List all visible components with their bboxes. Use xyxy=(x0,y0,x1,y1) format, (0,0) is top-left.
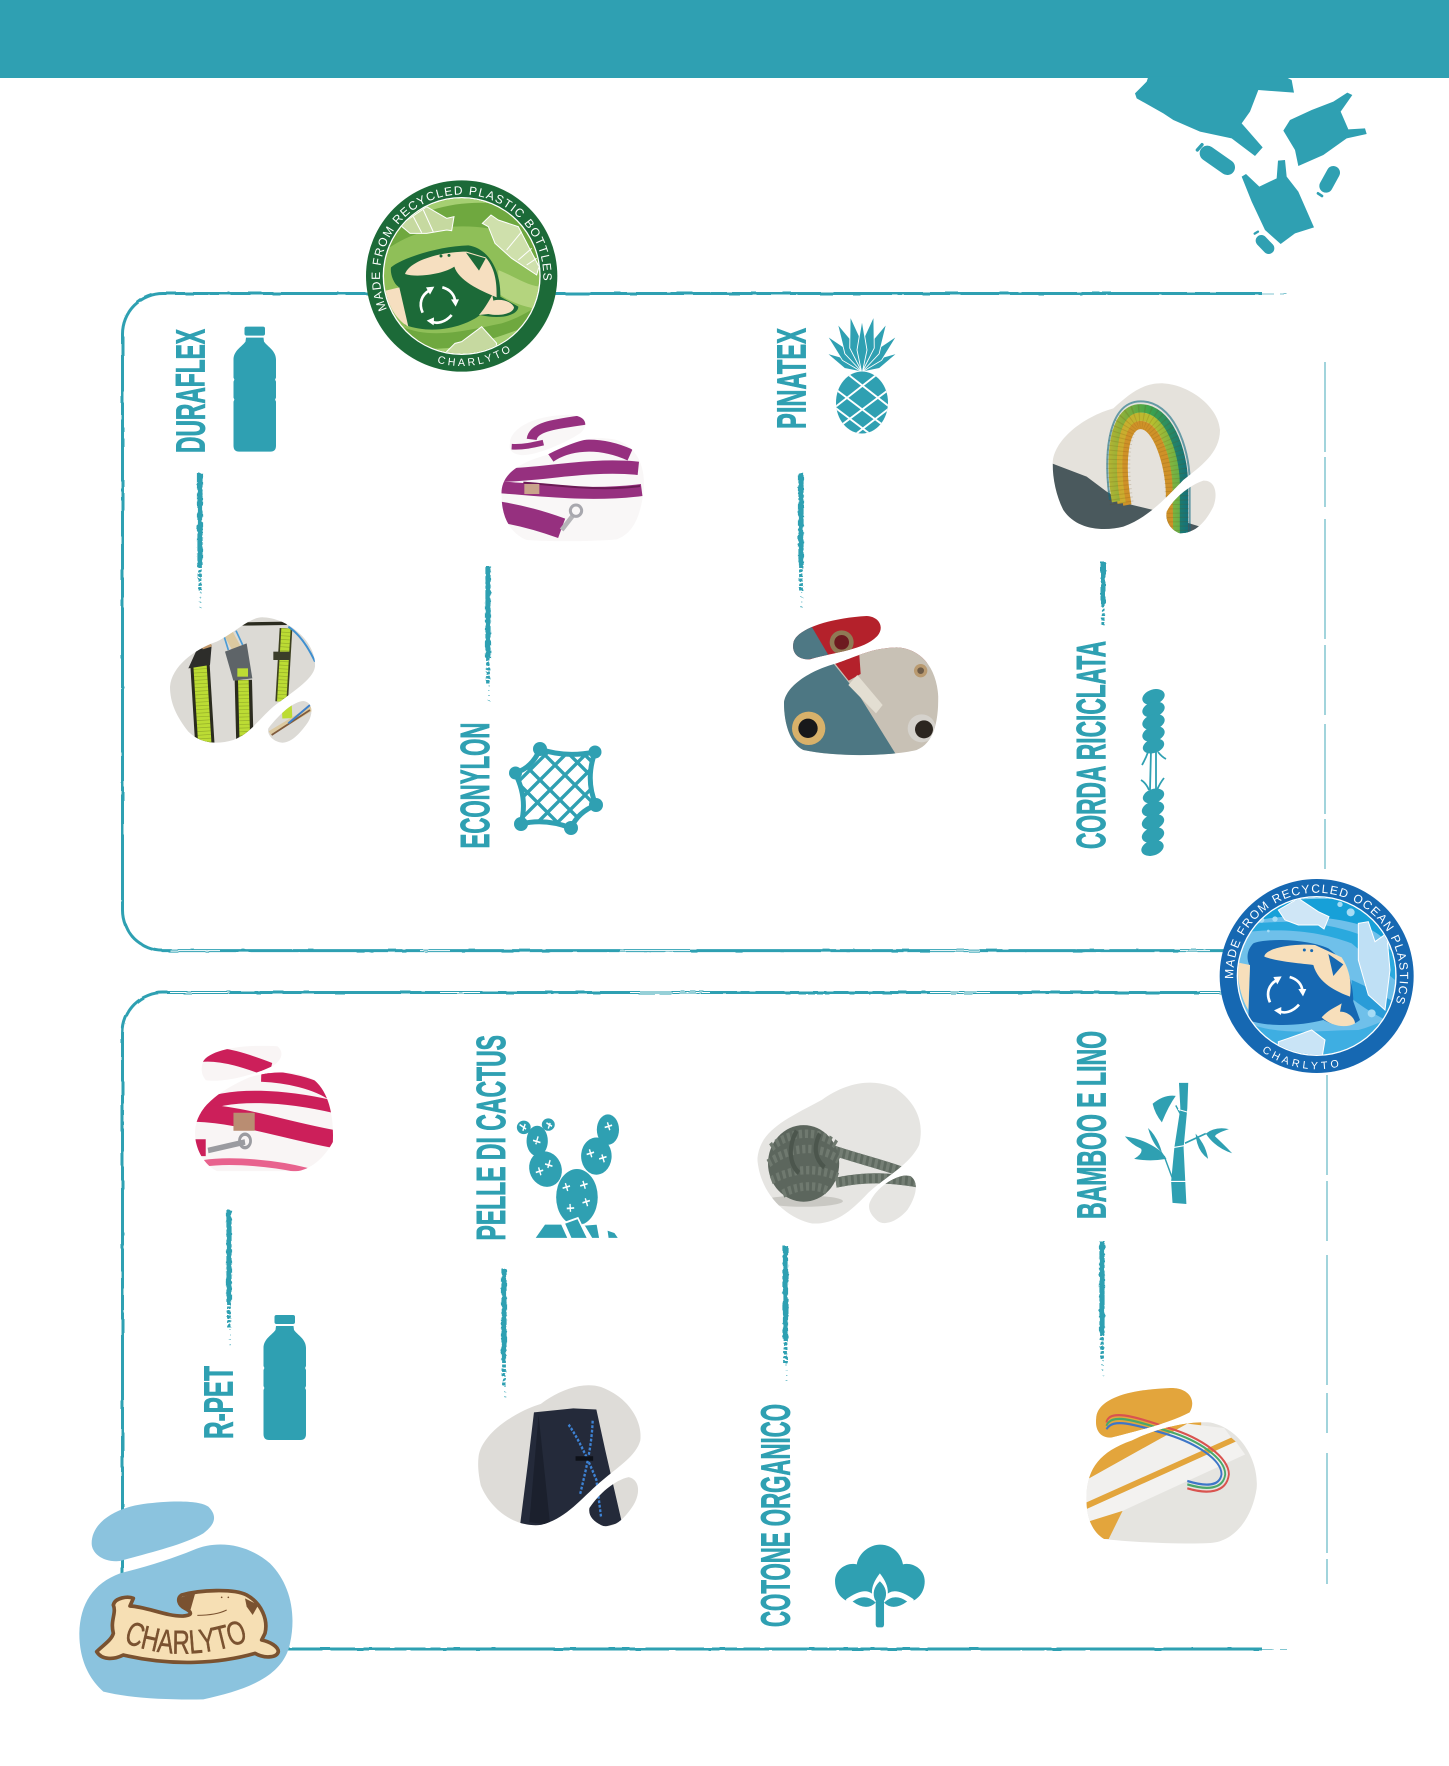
icon: bottle xyxy=(264,1315,306,1440)
label: Cotone organico: COTONE ORGANICO xyxy=(753,1404,799,1627)
icon: pineapple xyxy=(828,318,896,434)
logo dog details xyxy=(179,1594,258,1615)
icon: bottle xyxy=(234,327,276,452)
item: Duraflex xyxy=(170,326,315,743)
photo: black neoprene bag xyxy=(478,1385,640,1526)
divider brush stroke xyxy=(1102,1241,1103,1376)
badge: made from recycled plastic bottles: CHARLYTO xyxy=(438,346,510,366)
icon: bamboo xyxy=(1125,1083,1232,1204)
panel: recycled plastic frame xyxy=(122,294,1287,951)
item: Pinatex xyxy=(776,318,938,756)
header bar xyxy=(0,0,1449,78)
item: Cotone organico xyxy=(758,1082,925,1628)
photo: lime harness xyxy=(170,617,315,743)
divider brush stroke xyxy=(504,1269,505,1401)
divider brush stroke xyxy=(786,1246,787,1381)
divider brush stroke xyxy=(801,473,802,608)
icon: net xyxy=(509,742,603,835)
badge: made from recycled plastic bottles: MADE FROM RECYCLED PLASTIC BOTTLES xyxy=(372,186,552,312)
logo: Charlyto xyxy=(79,1502,292,1700)
label: Pelle di cactus: PELLE DI CACTUS xyxy=(468,1035,514,1240)
label: Duraflex: DURAFLEX xyxy=(168,329,214,453)
logo wordmark: CHARLYTO xyxy=(126,1621,246,1654)
item: Pelle di cactus xyxy=(476,1036,640,1526)
divider brush stroke xyxy=(1100,562,1106,625)
photo: green rope knot toy xyxy=(758,1082,921,1224)
label: R-PET: R-PET xyxy=(196,1366,242,1439)
label: Corda riciclata: CORDA RICICLATA xyxy=(1068,641,1114,849)
photo: pink leash xyxy=(195,1046,333,1172)
badge: made from recycled ocean plastics: MADE FROM RECYCLED OCEAN PLASTICS xyxy=(1224,884,1408,1004)
photo: orange and white fleece with rainbow cord xyxy=(1086,1388,1257,1544)
icon: rope xyxy=(1139,686,1167,859)
label: Pinatex: PINATEX xyxy=(768,328,814,429)
label: Bamboo e lino: BAMBOO E LINO xyxy=(1068,1031,1114,1219)
item: R-PET xyxy=(195,1046,333,1440)
photo: rainbow rope handle xyxy=(1052,383,1220,534)
icon: cactus xyxy=(517,1114,619,1239)
photo: pinatex patch with grommets xyxy=(784,616,938,756)
photo: magenta leash xyxy=(502,416,642,538)
logo lower blob xyxy=(79,1545,292,1699)
badge: made from recycled plastic bottles xyxy=(366,180,558,372)
panel: ocean plastic frame xyxy=(122,992,1287,1650)
icon: cotton flower xyxy=(835,1545,925,1627)
right edge broken line xyxy=(1325,362,1327,1584)
divider brush stroke xyxy=(197,473,203,608)
badge: made from recycled ocean plastics xyxy=(1220,879,1414,1073)
logo dog body xyxy=(97,1591,278,1662)
logo upper blob xyxy=(92,1502,214,1561)
badge: made from recycled ocean plastics: CHARLYTO xyxy=(1263,1046,1338,1070)
divider brush stroke xyxy=(229,1210,230,1345)
item: Corda riciclata xyxy=(1052,383,1220,856)
label: Econylon: ECONYLON xyxy=(452,723,498,848)
divider brush stroke xyxy=(488,566,489,701)
item: Bamboo e lino xyxy=(1076,1032,1257,1544)
icon: falling plastic bags and bottles xyxy=(1135,77,1367,248)
item: Econylon xyxy=(460,416,642,848)
